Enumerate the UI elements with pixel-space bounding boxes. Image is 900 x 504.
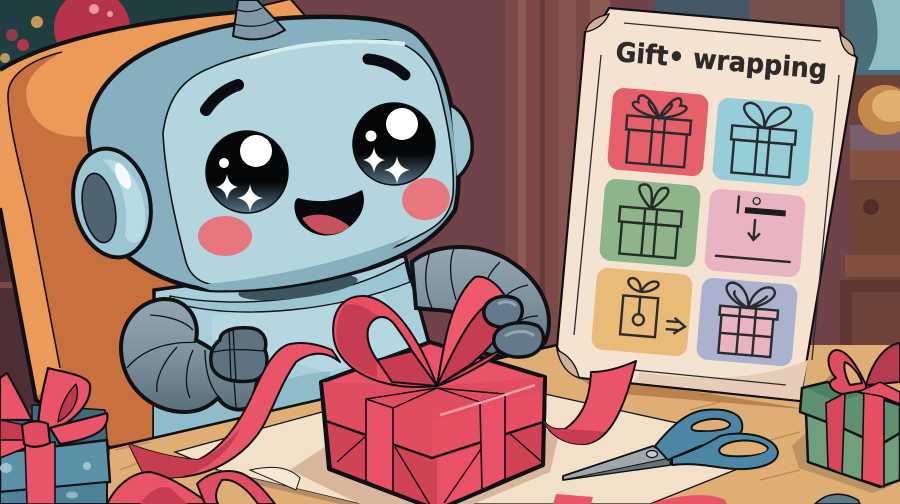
tile: red gift [607,87,709,177]
box shadow [290,430,560,504]
lower handle [672,434,778,469]
tile: yellow box and arrow [591,267,693,357]
antenna [233,0,285,39]
robot right hand [484,296,543,357]
lid top [323,345,543,422]
bow [828,350,866,394]
right eye [353,103,435,185]
right ear [451,105,472,178]
left fist [211,328,267,381]
upper handle [655,410,742,460]
scissors [563,410,778,480]
vertical ribbon [25,442,55,504]
left ribbon band [366,399,393,494]
mouth [294,190,364,236]
robot right arm [412,246,549,357]
bow [38,368,90,430]
wrapping paper [175,394,735,504]
left loop [333,296,437,387]
chair [0,0,304,448]
left trailing ribbon [129,343,340,479]
neck shadow [237,269,359,305]
poster corner curls [557,14,854,378]
eyebrows [206,85,238,110]
vertical ribbons [826,393,845,474]
left ear [63,141,161,265]
tile: green gift [599,178,701,268]
bottom loose ribbons [107,471,860,504]
robot left arm [121,299,267,412]
right ribbon band [480,394,505,490]
left blue gift [0,368,110,504]
red gift box [321,342,545,504]
poster: gift wrapping [557,8,857,412]
robot head [63,0,472,290]
robot body [154,256,432,446]
bottom scissors scrap [815,494,860,504]
left eye [206,131,288,213]
tile: blue gift [712,97,814,187]
christmas tree and ornament [0,0,264,70]
head shell [88,17,458,290]
desk [107,345,900,504]
face plate [163,40,453,285]
cheeks [198,216,252,256]
tile: pink instruction [704,188,806,278]
ribbon bow [333,277,510,387]
box body [321,342,545,504]
right loop [437,277,508,386]
right trailing ribbon [543,361,636,444]
tile: lilac gift [696,277,798,367]
poster title: Gift• wrapping [614,37,828,86]
green gift [792,343,900,493]
